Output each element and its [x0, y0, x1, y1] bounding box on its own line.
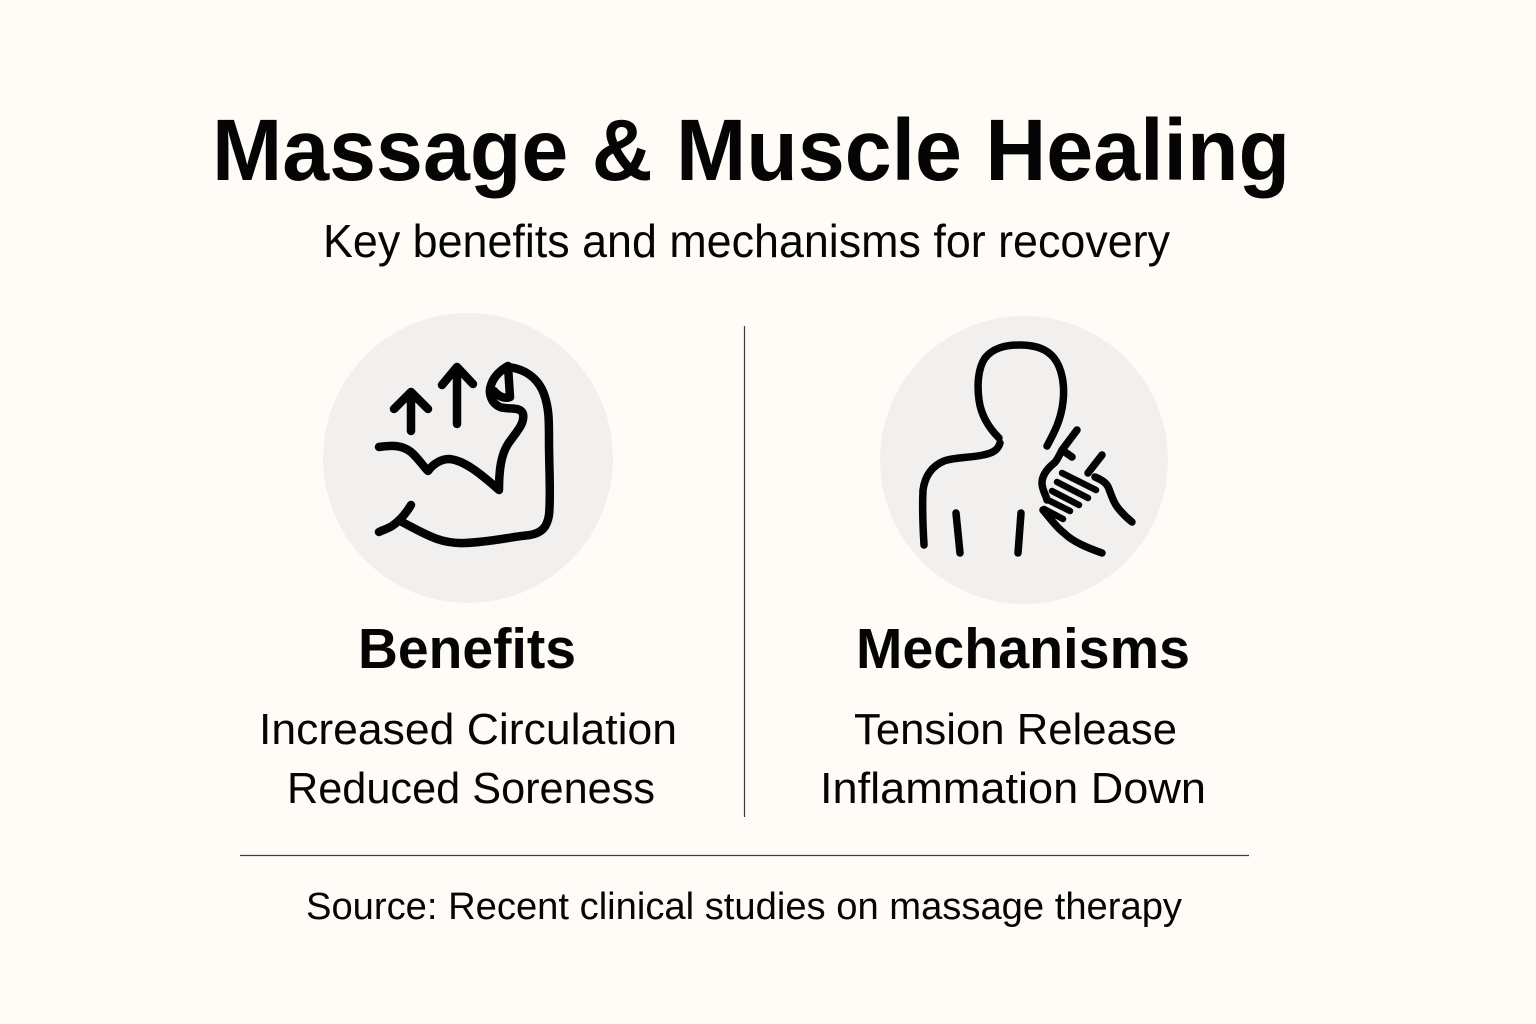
text: tension release: Tension Release	[854, 705, 1177, 754]
title: Massage & Muscle Healing	[212, 102, 1290, 199]
source note: Source: Recent clinical studies on massage therapy	[306, 886, 1182, 928]
icon: person receiving shoulder massage	[880, 316, 1168, 604]
heading: mechanisms: Mechanisms	[856, 617, 1190, 681]
heading: benefits: Benefits	[358, 617, 576, 681]
text: reduced soreness: Reduced Soreness	[287, 764, 655, 813]
panel: benefits	[259, 313, 677, 813]
text: inflammation down: Inflammation Down	[820, 764, 1206, 813]
panel: mechanisms	[820, 316, 1206, 813]
icon: flexed muscle with up arrows	[323, 313, 613, 603]
text: increased circulation: Increased Circulation	[259, 705, 677, 754]
subtitle: Key benefits and mechanisms for recovery	[323, 215, 1170, 267]
